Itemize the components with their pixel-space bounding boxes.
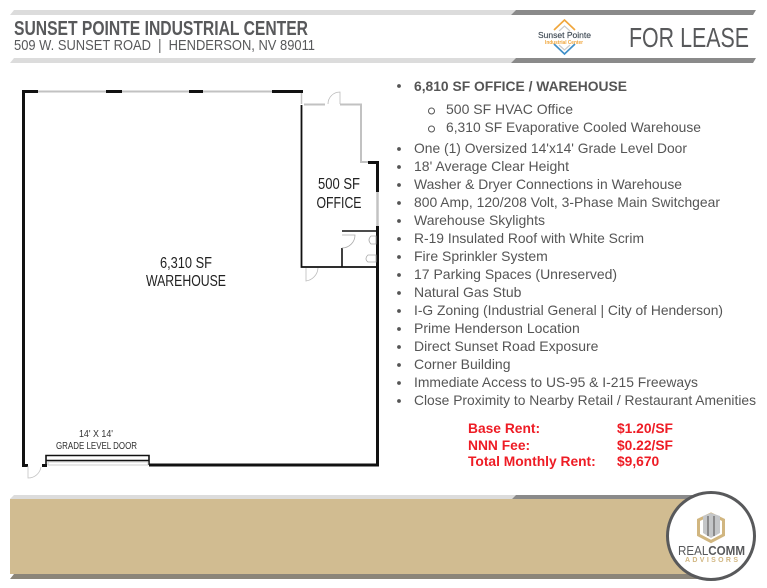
man door	[28, 466, 41, 478]
header stripe top	[10, 10, 756, 15]
office label: OFFICE	[316, 195, 362, 212]
feature list: Washer & Dryer Connections in Warehouse	[414, 176, 682, 192]
header stripe bottom	[10, 58, 756, 63]
pricing table: Total Monthly Rent:	[468, 454, 596, 469]
feature list: R-19 Insulated Roof with White Scrim	[414, 230, 644, 246]
feature list: Warehouse Skylights	[414, 212, 545, 228]
Realcomm Advisors logo badge: ADVISORS	[685, 557, 738, 564]
pricing table: $1.20/SF	[617, 421, 673, 436]
office label: 500 SF	[318, 176, 360, 193]
floor plan	[22, 91, 378, 478]
feature list: I-G Zoning (Industrial General | City of Henderson)	[414, 302, 723, 318]
bullets	[397, 84, 434, 403]
office door	[306, 268, 318, 281]
feature list: 6,310 SF Evaporative Cooled Warehouse	[446, 119, 701, 135]
door label: 14' X 14'	[79, 428, 113, 440]
top windows	[38, 90, 272, 92]
feature list: Immediate Access to US-95 & I-215 Freeways	[414, 374, 698, 390]
feature list: Prime Henderson Location	[414, 320, 580, 336]
title: SUNSET POINTE INDUSTRIAL CENTER	[14, 17, 308, 40]
feature list: 800 Amp, 120/208 Volt, 3-Phase Main Switchgear	[414, 194, 720, 210]
exterior top wall piers	[22, 90, 303, 93]
footer band	[10, 495, 700, 579]
address: 509 W. SUNSET ROAD | HENDERSON, NV 89011	[14, 37, 315, 54]
door label	[56, 428, 137, 452]
restroom door and fixtures	[342, 235, 355, 248]
Realcomm Advisors logo badge	[668, 492, 754, 580]
logo: Sunset Pointe	[538, 20, 591, 54]
pricing table: $0.22/SF	[617, 438, 673, 453]
feature list: 6,810 SF OFFICE / WAREHOUSE	[414, 78, 627, 94]
warehouse label: 6,310 SF	[160, 255, 212, 272]
warehouse label: WAREHOUSE	[146, 273, 226, 290]
logo: Sunset Pointe: Sunset Pointe	[538, 30, 591, 40]
office glazing and door	[304, 104, 368, 162]
exterior and interior walls	[24, 91, 28, 466]
logo: Sunset Pointe: Industrial Center	[545, 40, 584, 46]
office label	[316, 176, 362, 212]
pricing table: $9,670	[617, 454, 660, 469]
grade level door	[46, 456, 149, 465]
feature list: 500 SF HVAC Office	[446, 101, 573, 117]
pricing table: NNN Fee:	[468, 438, 530, 453]
feature list: Fire Sprinkler System	[414, 248, 548, 264]
feature list	[397, 78, 756, 408]
feature list: Close Proximity to Nearby Retail / Restaurant Amenities	[414, 392, 756, 408]
feature list: 18' Average Clear Height	[414, 158, 569, 174]
Realcomm Advisors logo badge: REALCOMM	[678, 544, 745, 558]
warehouse label	[146, 255, 226, 290]
feature list: Direct Sunset Road Exposure	[414, 338, 599, 354]
feature list: Corner Building	[414, 356, 510, 372]
pricing table: Base Rent:	[468, 421, 540, 436]
door label: GRADE LEVEL DOOR	[56, 440, 137, 452]
feature list: 17 Parking Spaces (Unreserved)	[414, 266, 617, 282]
feature list: Natural Gas Stub	[414, 284, 522, 300]
feature list: One (1) Oversized 14'x14' Grade Level Door	[414, 140, 687, 156]
pricing table	[468, 421, 673, 469]
